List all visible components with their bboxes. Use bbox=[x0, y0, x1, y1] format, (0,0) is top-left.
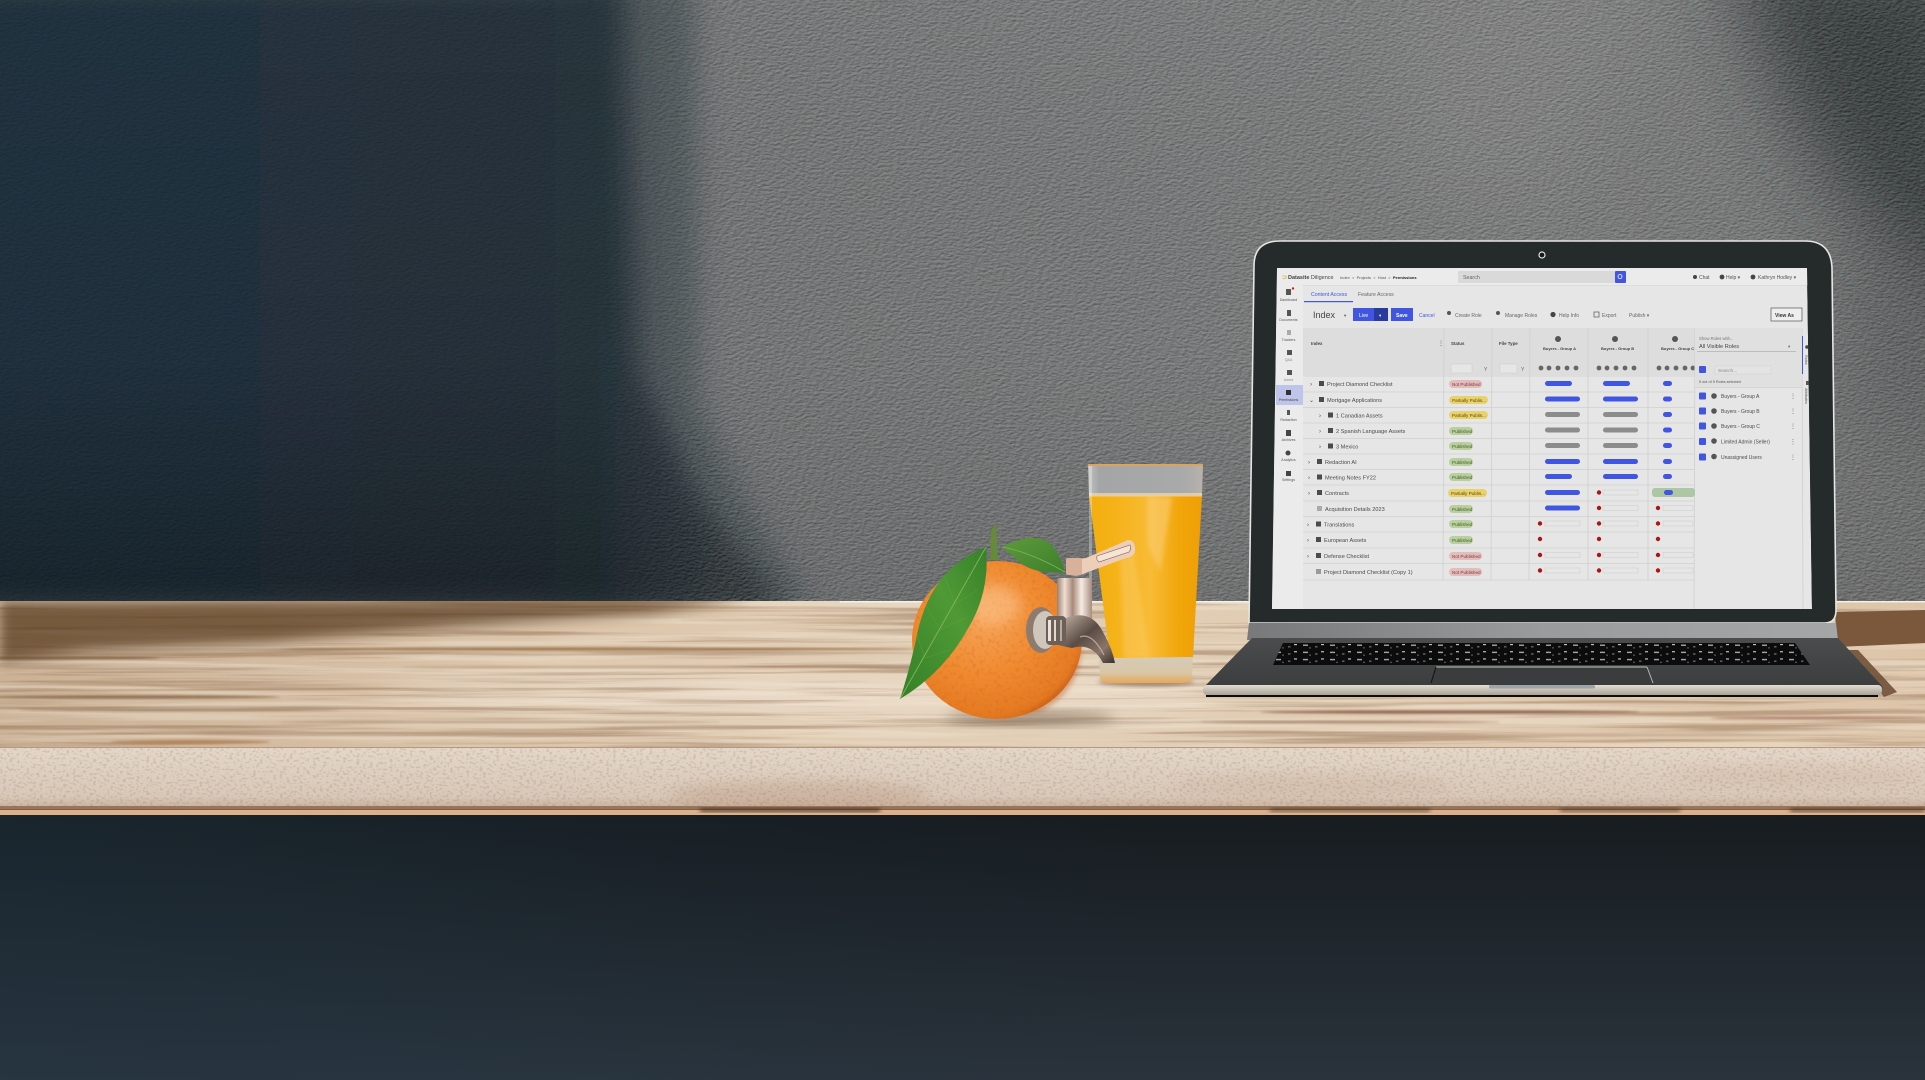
roles side panel: ▾ bbox=[1788, 344, 1791, 349]
table header: Y bbox=[1521, 367, 1525, 373]
table header bbox=[1303, 328, 1695, 377]
top navigation bar: Kathryn Hodley ▾ bbox=[1758, 275, 1797, 281]
role rows: Buyers - Group A bbox=[1721, 394, 1760, 400]
roles side panel: 5 out of 5 Roles selected bbox=[1699, 380, 1741, 384]
hinge strip bbox=[1247, 623, 1838, 640]
status pills: Published bbox=[1452, 444, 1473, 449]
tabs: Content Access bbox=[1311, 292, 1347, 298]
table header: ⋮ bbox=[1438, 341, 1444, 347]
status pills: Published bbox=[1452, 522, 1473, 527]
roles side panel bbox=[1695, 328, 1802, 461]
index names: Acquisition Details 2023 bbox=[1325, 507, 1385, 513]
laptop bbox=[1203, 241, 1882, 697]
left sidebar: Analytics bbox=[1281, 458, 1296, 462]
index names: Translations bbox=[1324, 522, 1354, 528]
status pills: Published bbox=[1452, 507, 1473, 512]
table header: Status bbox=[1451, 341, 1465, 346]
spout bbox=[1058, 615, 1115, 663]
toolbar: Create Role bbox=[1455, 313, 1482, 319]
left sidebar: Q&A bbox=[1285, 358, 1293, 362]
status pills: Not Published bbox=[1452, 570, 1481, 575]
left sidebar: Users bbox=[1284, 378, 1293, 382]
table header: Index bbox=[1311, 341, 1323, 346]
flange bbox=[1026, 607, 1056, 653]
toolbar: Export bbox=[1602, 313, 1617, 319]
role rows: Buyers - Group B bbox=[1721, 409, 1760, 415]
row chevrons and folder icons: › bbox=[1308, 460, 1310, 466]
row chevrons and folder icons: › bbox=[1319, 444, 1321, 450]
status pills bbox=[1448, 380, 1488, 576]
role rows: ⋮ bbox=[1790, 409, 1796, 415]
lever handle bbox=[1066, 540, 1135, 576]
index names: Project Diamond Checklist bbox=[1327, 382, 1393, 388]
top navigation bar: ⊃ bbox=[1282, 275, 1287, 281]
left sidebar: Documents bbox=[1279, 318, 1298, 322]
toolbar: ▾ bbox=[1344, 313, 1347, 318]
status pills: Published bbox=[1452, 429, 1473, 434]
permission bars bbox=[1538, 381, 1695, 573]
left sidebar bbox=[1272, 285, 1303, 609]
role rows: Buyers - Group C bbox=[1721, 424, 1760, 430]
status pills: Published bbox=[1452, 460, 1473, 465]
keyboard deck bbox=[1204, 638, 1882, 690]
roles side panel: Search... bbox=[1718, 368, 1737, 374]
left sidebar: Permissions bbox=[1279, 398, 1298, 402]
glass of juice bbox=[1088, 465, 1203, 687]
orange body bbox=[912, 561, 1082, 719]
status pills: Partially Publis... bbox=[1452, 398, 1486, 403]
toolbar: Index bbox=[1313, 310, 1336, 320]
index names bbox=[1324, 382, 1413, 576]
small leaf bbox=[1002, 538, 1065, 572]
stem bbox=[990, 523, 998, 560]
status pills: Not Published bbox=[1452, 554, 1481, 559]
index names: Redaction AI bbox=[1325, 460, 1357, 466]
tabs bbox=[1304, 292, 1394, 302]
roles side panel: All Visible Roles bbox=[1699, 344, 1739, 350]
contact shadow bbox=[945, 711, 1115, 725]
camera bbox=[1539, 252, 1545, 258]
top navigation bar: Help ▾ bbox=[1726, 275, 1741, 281]
row chevrons and folder icons: › bbox=[1308, 476, 1310, 482]
left sidebar: Archives bbox=[1282, 438, 1296, 442]
role rows: ⋮ bbox=[1790, 424, 1796, 430]
table header: Buyers - Group A bbox=[1543, 346, 1576, 351]
toolbar: Publish ▾ bbox=[1629, 313, 1650, 319]
row chevrons and folder icons: › bbox=[1310, 382, 1312, 388]
index names: Meeting Notes FY22 bbox=[1325, 476, 1376, 482]
index names: Mortgage Applications bbox=[1327, 398, 1382, 404]
keyboard bbox=[1273, 643, 1810, 665]
vertical side tabs: Attributes bbox=[1804, 388, 1808, 404]
top navigation bar: Chat bbox=[1699, 275, 1710, 281]
index names: Contracts bbox=[1325, 491, 1349, 497]
role rows: ⋮ bbox=[1790, 394, 1796, 400]
table header: Buyers - Group C bbox=[1661, 346, 1694, 351]
status pills: Partially Publis... bbox=[1452, 413, 1486, 418]
top navigation bar: Datasite Diligence bbox=[1288, 275, 1334, 281]
table grid lines bbox=[1303, 328, 1803, 609]
illustration: orange with tap and glass of juice bbox=[900, 465, 1203, 725]
vertical side tabs: Roles bbox=[1804, 355, 1808, 365]
index names: European Assets bbox=[1324, 538, 1366, 544]
index names: 3 Mexico bbox=[1336, 444, 1358, 450]
index names: 1 Canadian Assets bbox=[1336, 414, 1383, 420]
top navigation bar bbox=[1272, 268, 1812, 286]
wooden shelf bbox=[0, 601, 1925, 815]
status pills: Published bbox=[1452, 538, 1473, 543]
status pills: Published bbox=[1452, 475, 1473, 480]
big leaf bbox=[900, 547, 987, 699]
toolbar bbox=[1313, 308, 1802, 321]
background: wall with light and shadow bbox=[0, 0, 1925, 610]
row chevrons and folder icons: › bbox=[1319, 414, 1321, 420]
roles side panel: Show Roles with... bbox=[1699, 336, 1733, 341]
role rows: ⋮ bbox=[1790, 455, 1796, 461]
status pills: Not Published bbox=[1452, 382, 1481, 387]
index names: 2 Spanish Language Assets bbox=[1336, 429, 1406, 435]
tabs: Feature Access bbox=[1358, 292, 1394, 298]
row chevrons and folder icons: › bbox=[1308, 491, 1310, 497]
toolbar: Manage Roles bbox=[1505, 313, 1538, 319]
role rows: ⋮ bbox=[1790, 440, 1796, 446]
role rows bbox=[1699, 392, 1796, 461]
toolbar: ▾ bbox=[1379, 313, 1382, 318]
toolbar: Live bbox=[1359, 313, 1368, 319]
role rows: Unassigned Users bbox=[1721, 455, 1762, 461]
left sidebar: Trackers bbox=[1282, 338, 1296, 342]
toolbar: Cancel bbox=[1419, 313, 1435, 319]
table header: Y bbox=[1484, 367, 1488, 373]
laptop lid and bezel bbox=[1249, 241, 1836, 623]
left sidebar: Settings bbox=[1282, 478, 1295, 482]
top navigation bar: Index > Projects > Host > Permissions bbox=[1340, 275, 1417, 280]
row chevrons and folder icons: › bbox=[1319, 429, 1321, 435]
row chevrons and folder icons: › bbox=[1307, 538, 1309, 544]
lower dark wall bbox=[0, 815, 1925, 1080]
row chevrons and folder icons: › bbox=[1307, 522, 1309, 528]
row chevrons and folder icons: › bbox=[1307, 554, 1309, 560]
top navigation bar: Search bbox=[1463, 275, 1480, 281]
left sidebar: Redaction bbox=[1280, 418, 1297, 422]
status pills: Partially Publis... bbox=[1451, 491, 1485, 496]
toolbar: Help Info bbox=[1559, 313, 1579, 319]
index names: Defense Checklist bbox=[1324, 554, 1370, 560]
toolbar: View As bbox=[1775, 313, 1794, 319]
table header: File Type bbox=[1499, 341, 1518, 346]
table header: Buyers - Group B bbox=[1601, 346, 1634, 351]
front lip bbox=[1203, 685, 1882, 697]
shelf front face bbox=[0, 746, 1925, 815]
tap bbox=[1026, 540, 1135, 663]
trackpad bbox=[1431, 667, 1653, 685]
tap column bbox=[1057, 578, 1092, 624]
row chevrons and folder icons bbox=[1307, 381, 1333, 574]
row chevrons and folder icons: ⌄ bbox=[1309, 398, 1314, 404]
laptop screen: permissions table bbox=[1272, 268, 1812, 609]
shelf top surface bbox=[0, 601, 1925, 747]
index names: Project Diamond Checklist (Copy 1) bbox=[1324, 570, 1413, 576]
vertical side tabs bbox=[1802, 336, 1809, 404]
left sidebar: Dashboard bbox=[1280, 298, 1297, 302]
toolbar: Save bbox=[1396, 313, 1408, 319]
role rows: Limited Admin (Seller) bbox=[1721, 440, 1770, 446]
